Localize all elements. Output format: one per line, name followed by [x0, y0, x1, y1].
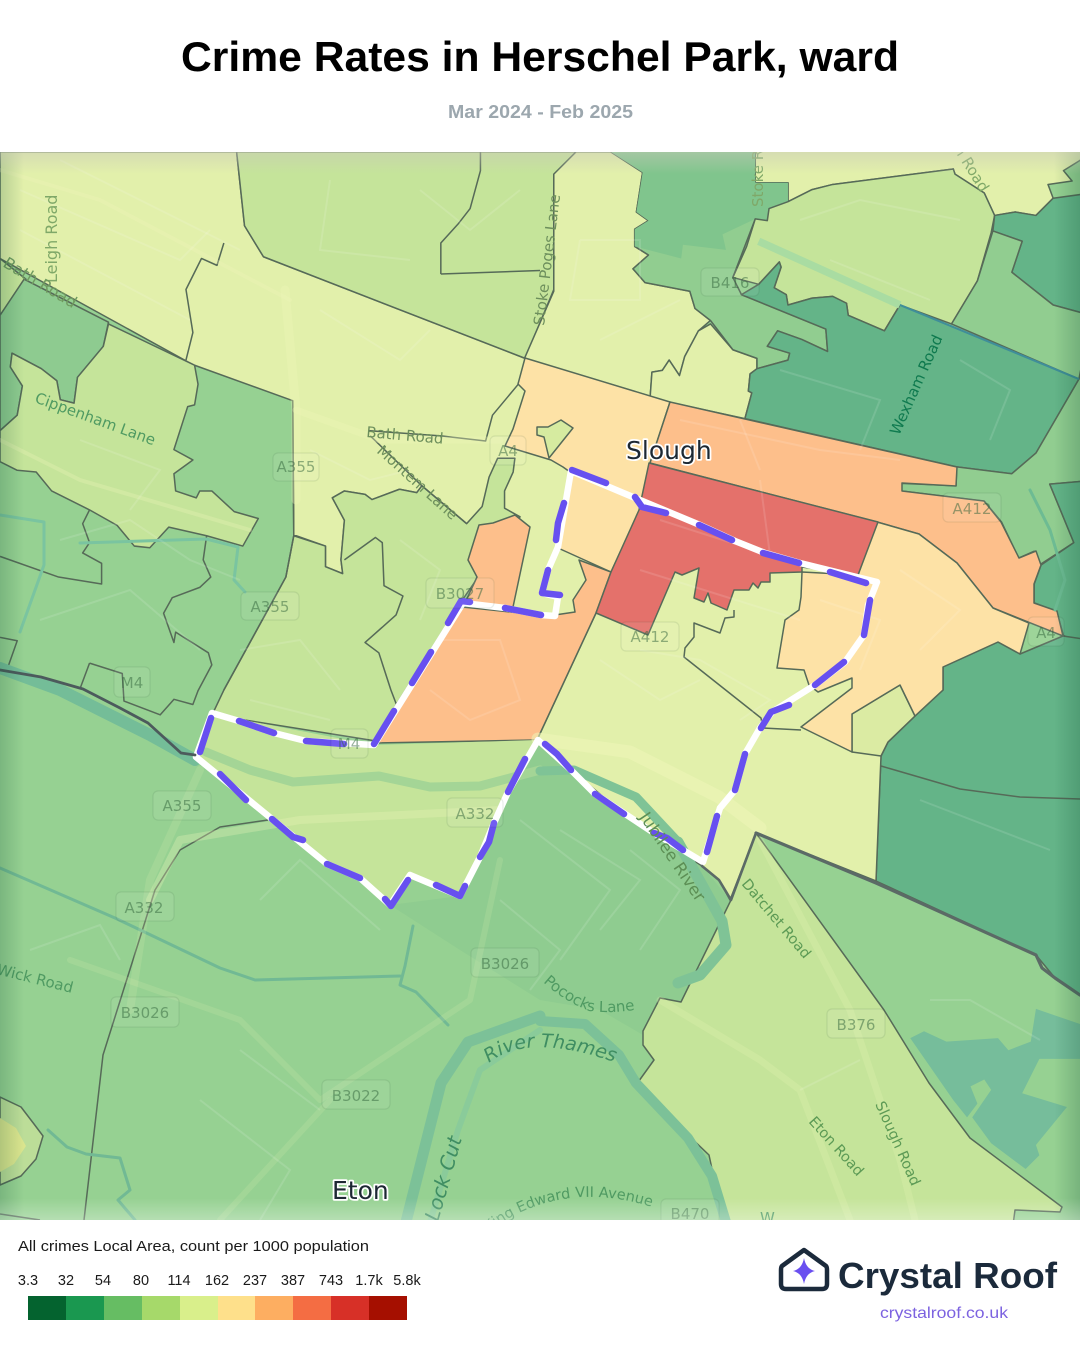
street name labels: Stoke Poges Lane [530, 193, 564, 326]
street name labels [0, 152, 990, 1271]
website: crystalroof.co.uk [880, 1305, 1009, 1322]
legend scale values: 5.8k [393, 1273, 421, 1289]
road number shields: B3026 [121, 1004, 169, 1022]
road number shields: B3027 [436, 585, 484, 603]
legend title: All crimes Local Area, count per 1000 population [18, 1239, 369, 1255]
legend [18, 1239, 421, 1320]
road number shields: A4 [1036, 624, 1056, 642]
legend scale values: 387 [281, 1273, 305, 1289]
legend scale values: 3.3 [18, 1273, 38, 1289]
brand name: Crystal Roof [838, 1255, 1058, 1296]
street name labels: Stoke Road [749, 123, 767, 207]
crime-rate areas: south and east [0, 358, 1080, 1225]
road number shields: B3026 [481, 955, 529, 973]
legend scale values [18, 1273, 421, 1289]
thick district boundary [0, 670, 1080, 995]
brand logo: Crystal Roof [781, 1250, 1058, 1322]
street name labels: Slough Road [871, 1099, 923, 1188]
street name labels: Lock Cut [420, 1132, 467, 1223]
legend scale values: 162 [205, 1273, 229, 1289]
map edge shading [0, 152, 1080, 1220]
road number shields [111, 268, 1064, 1227]
boundary purple dashes [200, 470, 870, 906]
street name labels: Montem Lane [373, 442, 461, 523]
street name labels: Jubilee River [635, 808, 709, 905]
local streets [20, 160, 1050, 1220]
road number shields: A355 [251, 598, 289, 616]
road number shields: A355 [163, 797, 201, 815]
street name labels: Datchet Road [738, 876, 814, 962]
legend scale values: 32 [58, 1273, 74, 1289]
street name labels: Wexham Road [886, 332, 946, 438]
crime-rate areas: north-east [525, 148, 1080, 646]
street name labels: Bath Road [366, 423, 444, 448]
road number shields: M4 [121, 674, 143, 692]
subtitle: date range: Mar 2024 - Feb 2025 [448, 101, 633, 122]
road number shields: B470 [671, 1205, 709, 1223]
street name labels: River Thames [484, 1033, 617, 1062]
road number shields: B376 [837, 1016, 875, 1034]
road number shields: A332 [456, 805, 494, 823]
legend scale values: 54 [95, 1273, 111, 1289]
waterways [0, 490, 1065, 1222]
legend scale values: 80 [133, 1273, 149, 1289]
place label: Eton: Eton [332, 1176, 389, 1205]
title: Crime Rates in Herschel Park, ward [181, 33, 899, 80]
place label: Slough: Slough [626, 436, 712, 465]
road number shields: A412 [953, 500, 991, 518]
legend scale values: 237 [243, 1273, 267, 1289]
legend scale values: 114 [167, 1273, 191, 1289]
lake east of Datchet [910, 1009, 1080, 1169]
street name labels: Wexham Road [921, 95, 993, 195]
boundary white underlay [196, 471, 877, 905]
legend scale values: 743 [319, 1273, 343, 1289]
street name labels: Pococks Lane [544, 974, 634, 1012]
crime-rate areas: west and north [0, 152, 620, 741]
street name labels: W [760, 1209, 775, 1227]
street name labels: Cippenham Lane [33, 389, 158, 449]
ward boundary: Herschel Park [196, 470, 877, 906]
road number shields: A412 [631, 628, 669, 646]
road number shields: A332 [125, 899, 163, 917]
road number shields: B416 [711, 274, 749, 292]
road number shields: A355 [277, 458, 315, 476]
main roads [0, 168, 774, 1220]
road number shields: M4 [338, 735, 360, 753]
street name labels: Leigh Road [42, 195, 61, 283]
icon: house with star [781, 1250, 827, 1289]
road number shields: B3022 [332, 1087, 380, 1105]
road number shields: A4 [498, 442, 518, 460]
street name labels: Eton Road [805, 1114, 866, 1180]
legend scale values: 1.7k [355, 1273, 383, 1289]
street name labels: King Edward VII Avenue [488, 1186, 652, 1220]
legend colour swatches [28, 1296, 407, 1320]
street name labels: Bath Road [0, 253, 80, 312]
